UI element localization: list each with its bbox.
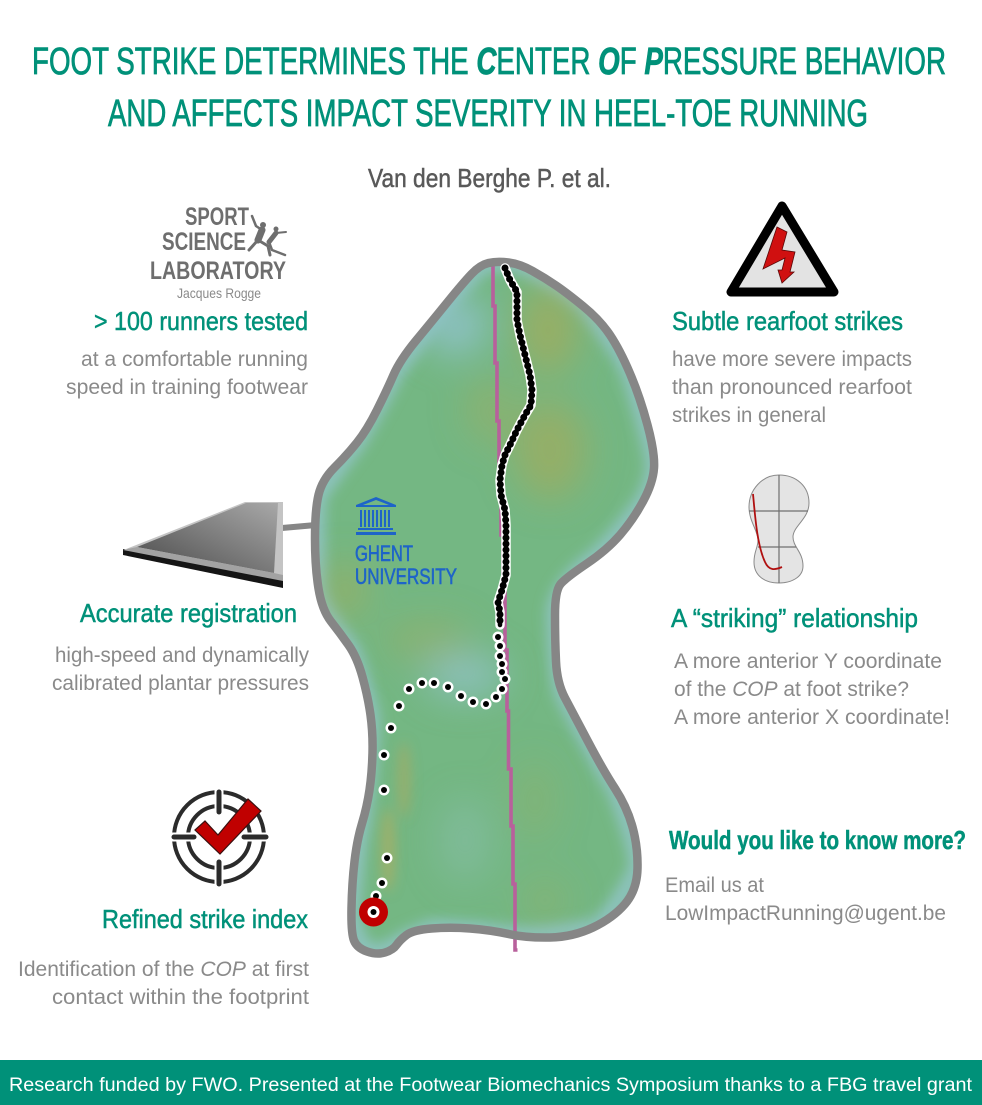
foot outline — [315, 262, 654, 954]
body text: of the COP at foot strike? — [674, 678, 909, 701]
body text — [66, 348, 308, 399]
logo: Ghent University: GHENT — [355, 541, 413, 566]
body text — [672, 348, 912, 427]
body text: LowImpactRunning@ugent.be — [665, 902, 946, 925]
heading: Subtle rearfoot strikes — [672, 306, 903, 336]
logo: Sport Science Laboratory: Jacques Rogge — [177, 285, 261, 301]
panel: accurate registration — [52, 502, 309, 695]
body text — [674, 650, 950, 729]
footprint pressure map — [300, 250, 670, 970]
connector: pressure plate to foot — [282, 525, 316, 528]
body text: strikes in general — [672, 404, 826, 427]
panel: runners tested — [66, 203, 308, 399]
midline of the foot — [493, 265, 518, 950]
body text: than pronounced rearfoot — [672, 376, 912, 399]
body text: have more severe impacts — [672, 348, 912, 371]
title — [32, 41, 946, 135]
author line: Van den Berghe P. et al. — [368, 163, 611, 193]
icon: university building — [356, 497, 396, 535]
foot heat map fill — [319, 266, 650, 950]
panel: contact — [665, 825, 966, 925]
logo: Ghent University — [355, 497, 457, 589]
panel: refined strike index — [18, 785, 309, 1009]
heading: > 100 runners tested — [94, 306, 308, 336]
panel: striking relationship — [671, 475, 950, 729]
icon: runners — [249, 216, 286, 255]
icon: small footprint with trace — [749, 475, 809, 583]
panel: subtle rearfoot strikes — [672, 206, 912, 427]
body text: contact within the footprint — [52, 986, 309, 1009]
logo: Sport Science Laboratory: SPORT — [185, 203, 249, 231]
logo: Ghent University: UNIVERSITY — [355, 564, 457, 589]
footer banner — [0, 1060, 982, 1105]
body text: Identification of the COP at first — [18, 958, 309, 981]
footer banner: Research funded by FWO. Presented at the Footwear Biomechanics Symposium thanks to a FBG travel grant — [9, 1075, 973, 1096]
logo: Sport Science Laboratory: SCIENCE — [162, 228, 246, 256]
body text — [18, 958, 309, 1009]
icon: pressure plate — [123, 502, 283, 588]
body text — [52, 644, 309, 695]
icon: target with check mark — [166, 785, 272, 889]
icon: high voltage warning — [731, 206, 834, 292]
body text: at a comfortable running — [81, 348, 308, 371]
body text: calibrated plantar pressures — [52, 672, 309, 695]
heading: Accurate registration — [80, 598, 297, 628]
body text: Email us at — [665, 874, 764, 897]
logo: Sport Science Laboratory: LABORATORY — [150, 257, 286, 285]
body text: A more anterior X coordinate! — [674, 706, 950, 729]
body text — [665, 874, 946, 925]
body text: A more anterior Y coordinate — [674, 650, 942, 673]
center of pressure trace — [370, 268, 532, 902]
heading: Refined strike index — [102, 904, 308, 934]
logo: Sport Science Laboratory — [150, 203, 286, 301]
heading: A “striking” relationship — [671, 603, 918, 633]
body text: high-speed and dynamically — [55, 644, 309, 667]
body text: speed in training footwear — [66, 376, 308, 399]
first contact marker — [359, 898, 388, 926]
